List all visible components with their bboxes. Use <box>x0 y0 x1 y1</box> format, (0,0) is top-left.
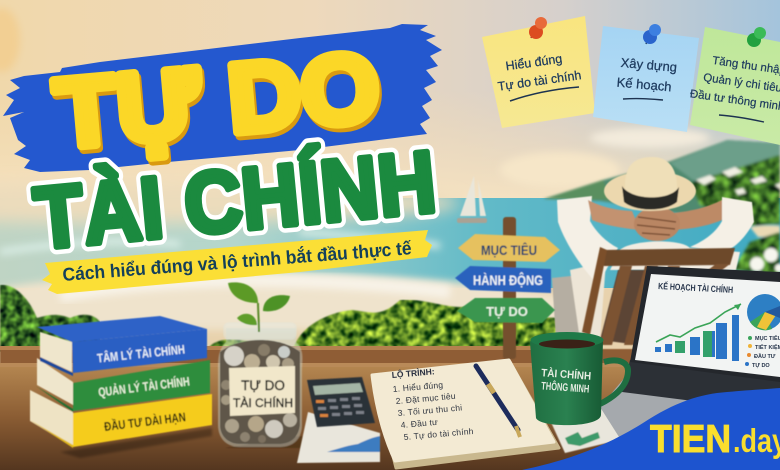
sign: Tự do <box>457 298 555 323</box>
paper with chart <box>297 400 640 463</box>
sign: Tự do: TỰ DO <box>486 304 528 319</box>
notebook: Lộ trình: 4. Đầu tư <box>400 417 438 430</box>
title: Tự do: TỰ DO <box>53 35 386 173</box>
title banner: blue brush stroke <box>3 24 442 172</box>
book: Tâm lý tài chính <box>37 316 207 376</box>
note: green <box>689 27 780 145</box>
icon: red pin <box>529 17 547 39</box>
title: Tài chính: TÀI CHÍNH <box>30 133 440 268</box>
torso and cloth <box>552 275 582 340</box>
jar label: TỰ DO <box>241 378 285 393</box>
green mug: THÔNG MINH <box>541 379 590 396</box>
green mug <box>530 332 628 425</box>
bar chart <box>655 304 741 361</box>
subtitle banner: Cách hiểu đúng và lộ trình bắt đầu thực tế <box>62 237 413 285</box>
laptop <box>600 266 780 470</box>
hills <box>543 140 780 275</box>
icon: sailboat <box>457 176 487 223</box>
title: Tài chính: TÀI CHÍNH <box>30 133 440 268</box>
bushes <box>0 285 100 352</box>
note: blue: Xây dựng <box>620 55 678 75</box>
note: blue: Kế hoạch <box>616 75 672 94</box>
book: Quản lý tài chính: QUẢN LÝ TÀI CHÍNH <box>97 373 191 400</box>
coin jar with plant <box>218 282 330 448</box>
wooden chair <box>582 247 735 345</box>
notebook: Lộ trình <box>372 360 559 468</box>
pie chart <box>747 294 780 330</box>
note: yellow: Tự do tài chính <box>497 68 582 94</box>
icon: clasped hands <box>634 207 680 241</box>
icon: green pin <box>747 27 766 47</box>
arms <box>588 200 640 230</box>
jar label: TÀI CHÍNH <box>233 395 293 410</box>
note: yellow <box>482 16 595 128</box>
stack of books <box>30 316 212 458</box>
jar label <box>229 366 295 416</box>
right sleeve <box>690 197 754 252</box>
book: Quản lý tài chính <box>36 358 210 412</box>
chart legend: ĐẦU TƯ <box>754 353 776 360</box>
green mug: TÀI CHÍNH <box>541 366 592 383</box>
sign: Hành động <box>455 266 551 293</box>
left sleeve <box>557 196 618 285</box>
chart legend <box>745 334 780 369</box>
sign: Hành động: HÀNH ĐỘNG <box>473 271 543 288</box>
person relaxing with straw hat <box>552 157 754 340</box>
chart legend: TỰ DO <box>752 363 770 369</box>
icon: blue pin <box>643 24 661 44</box>
note: blue <box>593 24 699 132</box>
book: Đầu tư dài hạn <box>30 390 212 448</box>
sticky notes <box>482 16 780 145</box>
notebook: Lộ trình: 5. Tự do tài chính <box>403 426 474 442</box>
title: Tự do: TỰ DO <box>50 31 384 169</box>
book: Tâm lý tài chính: TÂM LÝ TÀI CHÍNH <box>96 341 185 366</box>
notebook: Lộ trình: 2. Đặt mục tiêu <box>395 391 456 406</box>
icon: green sprout <box>228 282 290 332</box>
logo corner: blue wave <box>522 388 780 470</box>
notebook: Lộ trình: 3. Tối ưu thu chi <box>397 402 463 418</box>
laptop screen title: KẾ HOẠCH TÀI CHÍNH <box>658 281 733 295</box>
logo: TIEN.day: TIEN <box>650 418 731 461</box>
logo: TIEN.day <box>650 418 780 461</box>
notebook: Lộ trình: LỘ TRÌNH: <box>391 365 435 380</box>
note: yellow: Hiểu đúng <box>505 52 563 73</box>
sign post <box>455 217 560 359</box>
calculator <box>307 377 375 427</box>
notebook: Lộ trình: 1. Hiểu đúng <box>392 380 444 394</box>
book: Đầu tư dài hạn: ĐẦU TƯ DÀI HẠN <box>103 409 187 434</box>
sign: Mục tiêu: MỤC TIÊU <box>481 241 537 258</box>
sign: Mục tiêu <box>458 234 560 262</box>
icon: straw hat <box>604 157 696 211</box>
icon: pen <box>476 366 520 437</box>
